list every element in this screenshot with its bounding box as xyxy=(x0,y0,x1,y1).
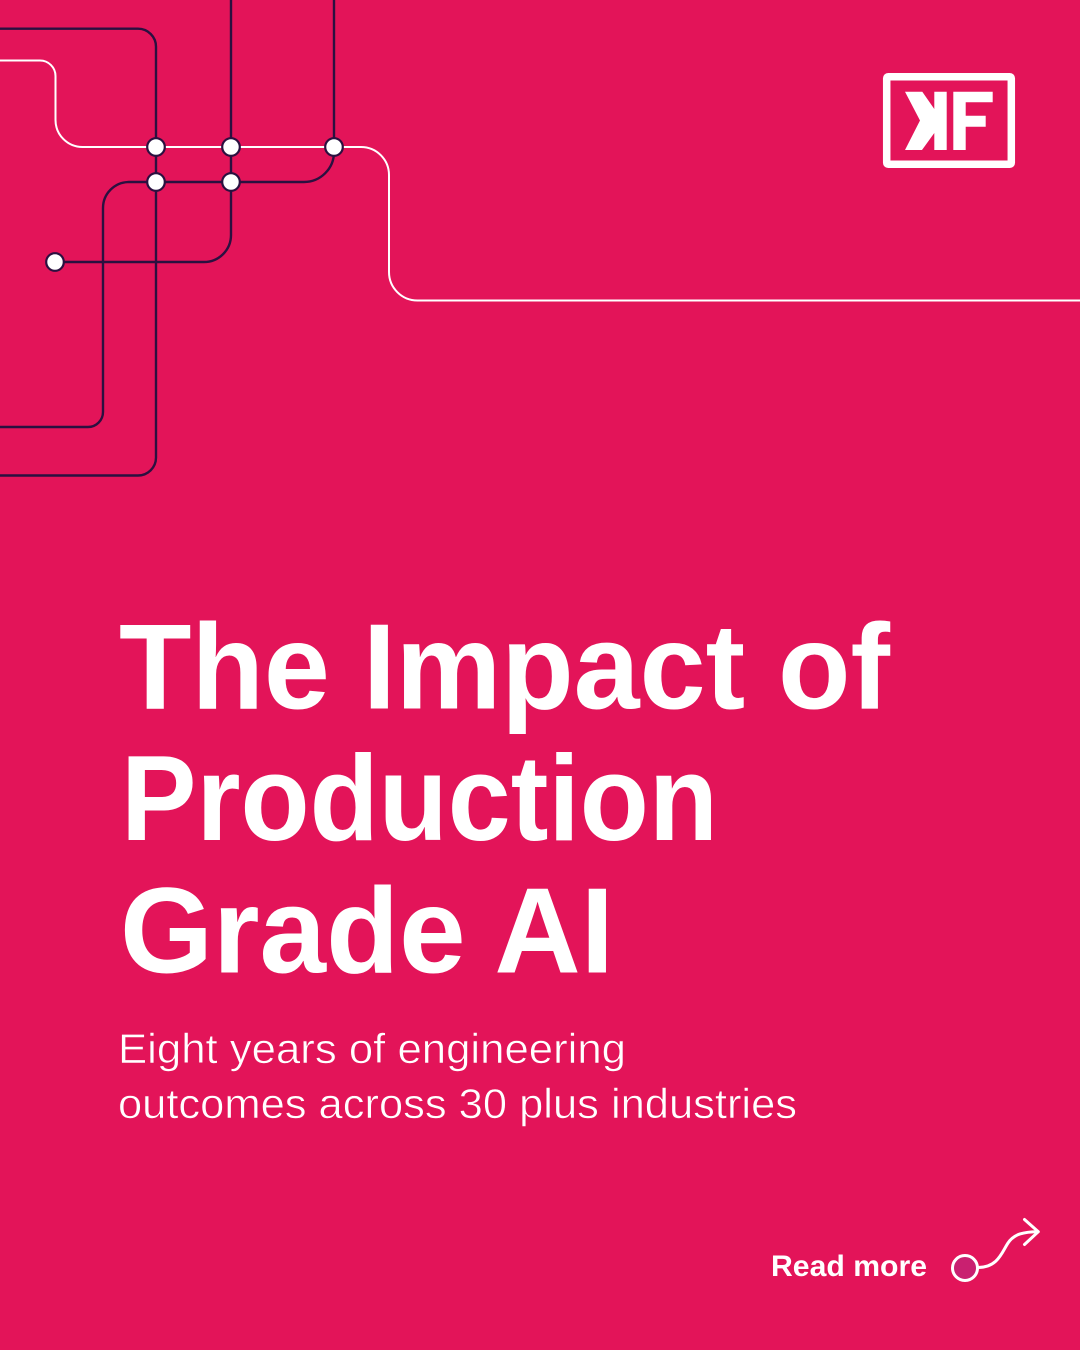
title: Production xyxy=(121,730,718,866)
white line xyxy=(0,60,1080,300)
title: The Impact of xyxy=(119,598,890,734)
icon: read more arrow xyxy=(952,1220,1038,1280)
title xyxy=(119,598,890,998)
subtitle xyxy=(118,1025,797,1127)
dark line: right drop to lower loop xyxy=(0,0,334,427)
title: Grade AI xyxy=(120,862,614,998)
dark line: middle drop to left node xyxy=(55,0,231,262)
circuit line network xyxy=(0,0,1080,476)
logo frame xyxy=(887,77,1011,164)
subtitle: outcomes across 30 plus industries xyxy=(118,1080,797,1127)
dark line: outer loop xyxy=(0,29,156,475)
logo: KF xyxy=(887,77,1011,164)
read more label: Read more xyxy=(771,1250,927,1283)
logo letters xyxy=(905,92,947,150)
subtitle: Eight years of engineering xyxy=(118,1025,626,1072)
junction nodes xyxy=(46,138,343,271)
